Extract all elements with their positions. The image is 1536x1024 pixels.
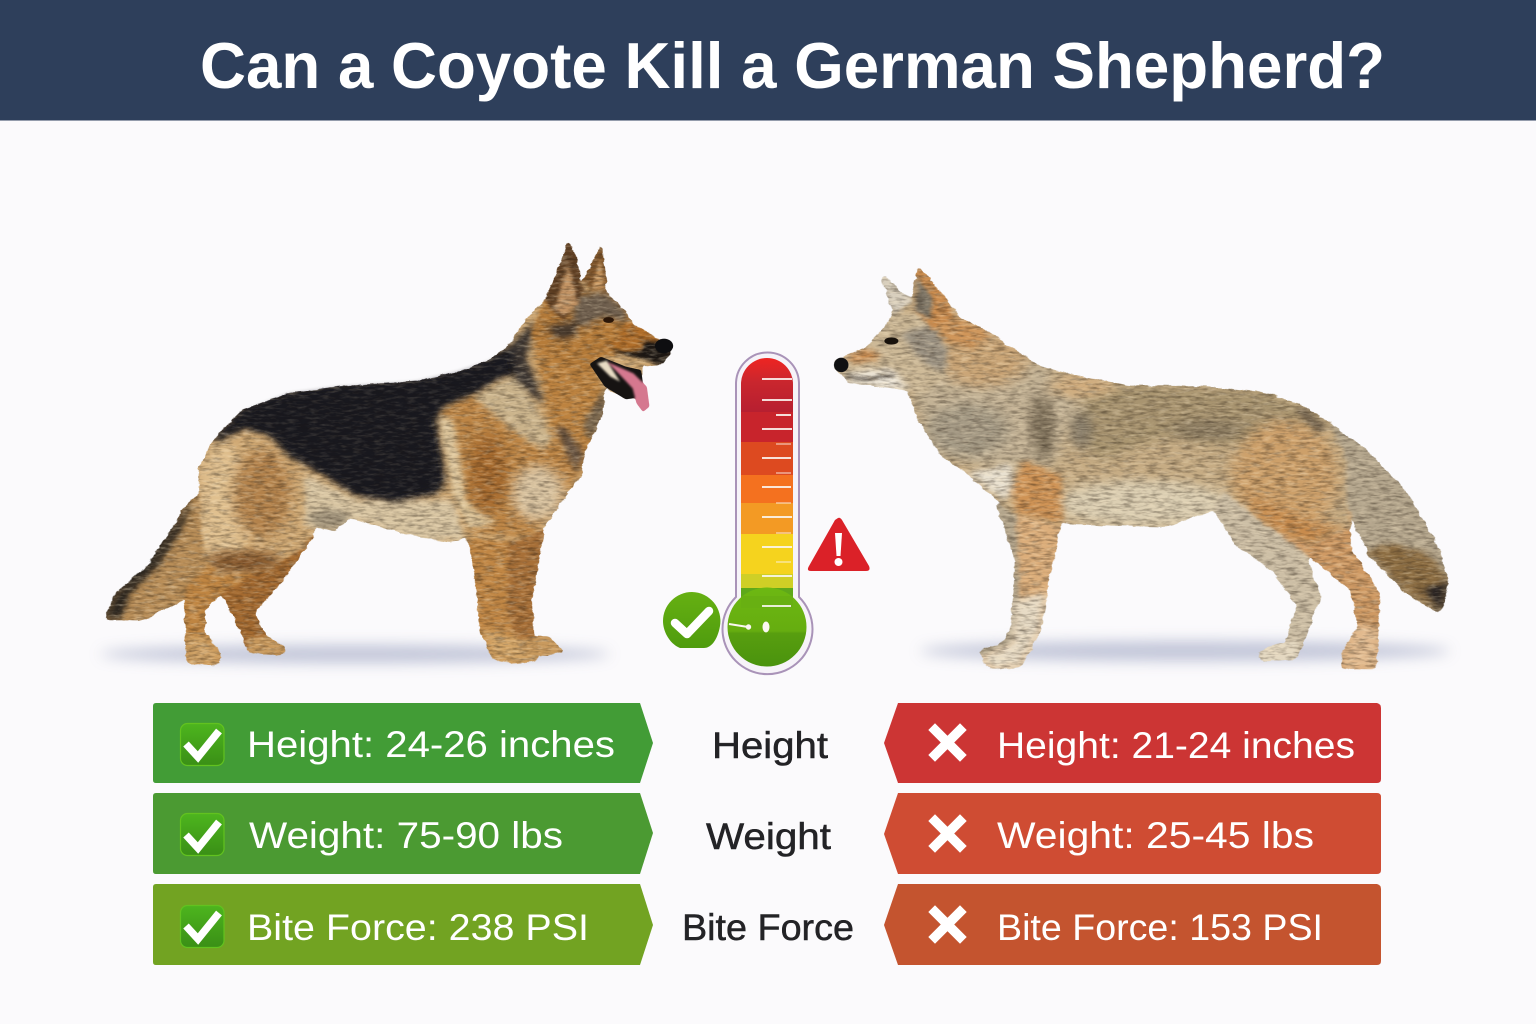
tail <box>1328 422 1447 612</box>
stat bar: shepherd weight: Weight: 75-90 lbs <box>249 815 563 856</box>
risk thermometer <box>723 353 813 674</box>
title: Can a Coyote Kill a German Shepherd? <box>200 29 1385 102</box>
neck shadow <box>499 318 548 408</box>
stat bar: shepherd height <box>153 703 653 783</box>
title banner <box>0 0 1536 120</box>
near hind leg <box>1228 473 1380 668</box>
stat bar: shepherd height: Height: 24-26 inches <box>247 724 615 765</box>
black saddle <box>212 347 517 502</box>
neck and chest <box>912 352 1082 466</box>
stat bar: coyote bite force <box>884 884 1381 965</box>
icon: safe check badge <box>663 592 720 648</box>
near front leg <box>465 523 538 662</box>
far legs <box>222 533 316 655</box>
illustration: German shepherd <box>100 240 683 664</box>
back and flank <box>1069 385 1330 460</box>
head <box>835 313 946 393</box>
icon: warning triangle <box>808 518 870 571</box>
stat bar: shepherd weight <box>153 793 653 874</box>
chest and shoulder <box>436 393 584 537</box>
panel: coyote stats <box>884 703 1381 965</box>
flank <box>304 473 465 540</box>
stat bar: coyote height: Height: 21-24 inches <box>997 725 1355 766</box>
stat bar: shepherd bite force: Bite Force: 238 PSI <box>247 907 589 948</box>
head <box>530 290 660 373</box>
saddle, mouth and tongue overlay <box>222 317 673 497</box>
stat bar: coyote height <box>884 703 1381 783</box>
body, head and markings <box>834 268 1352 540</box>
illustration: coyote <box>820 260 1450 669</box>
far legs <box>1210 480 1321 662</box>
ears <box>881 273 912 315</box>
stat bar: coyote bite force: Bite Force: 153 PSI <box>997 907 1323 948</box>
comparison labels: Bite Force <box>682 907 854 948</box>
near front leg <box>982 503 1063 669</box>
near hind leg <box>185 567 255 664</box>
panel: German shepherd stats <box>153 703 653 965</box>
comparison labels <box>682 725 854 948</box>
comparison labels: Weight <box>706 816 832 857</box>
colour scale <box>728 358 806 666</box>
stat bar: coyote weight: Weight: 25-45 lbs <box>997 815 1314 856</box>
neck <box>473 373 553 450</box>
coyote eye and nose <box>834 337 899 372</box>
comparison labels: Height <box>712 725 829 766</box>
thigh <box>198 444 250 558</box>
thermometer glass <box>723 353 813 674</box>
tail <box>106 490 218 621</box>
stat bar: shepherd bite force <box>153 884 653 965</box>
ears <box>583 244 606 292</box>
stat bar: coyote weight <box>884 793 1381 874</box>
scale ticks <box>729 379 792 627</box>
body, head and markings <box>186 240 683 590</box>
